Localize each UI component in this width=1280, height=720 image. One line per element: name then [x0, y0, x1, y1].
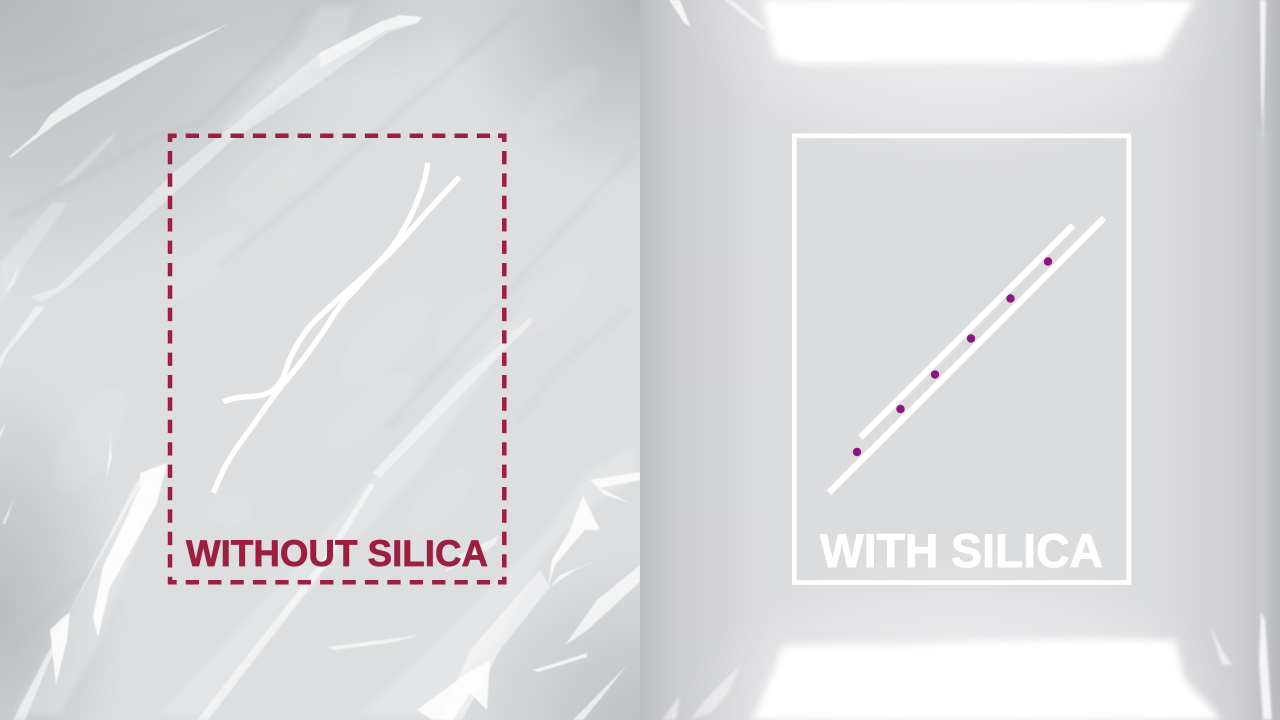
- solid frame: [794, 136, 1129, 583]
- label: with silica: WITH SILICA: [820, 524, 1103, 577]
- dashed frame: [170, 136, 504, 582]
- icon: tangled hair fibres: [213, 163, 460, 493]
- panel: without silica background (frizzy plastic film): [0, 0, 640, 720]
- panel: without silica diagram: [170, 136, 504, 582]
- icon: straight aligned hair fibres: [829, 218, 1104, 492]
- panel: with silica background (glossy plastic film): [640, 0, 1280, 720]
- icon: silica particles: [853, 257, 1052, 456]
- label: without silica: WITHOUT SILICA: [186, 533, 488, 574]
- panel: with silica diagram: [794, 136, 1129, 583]
